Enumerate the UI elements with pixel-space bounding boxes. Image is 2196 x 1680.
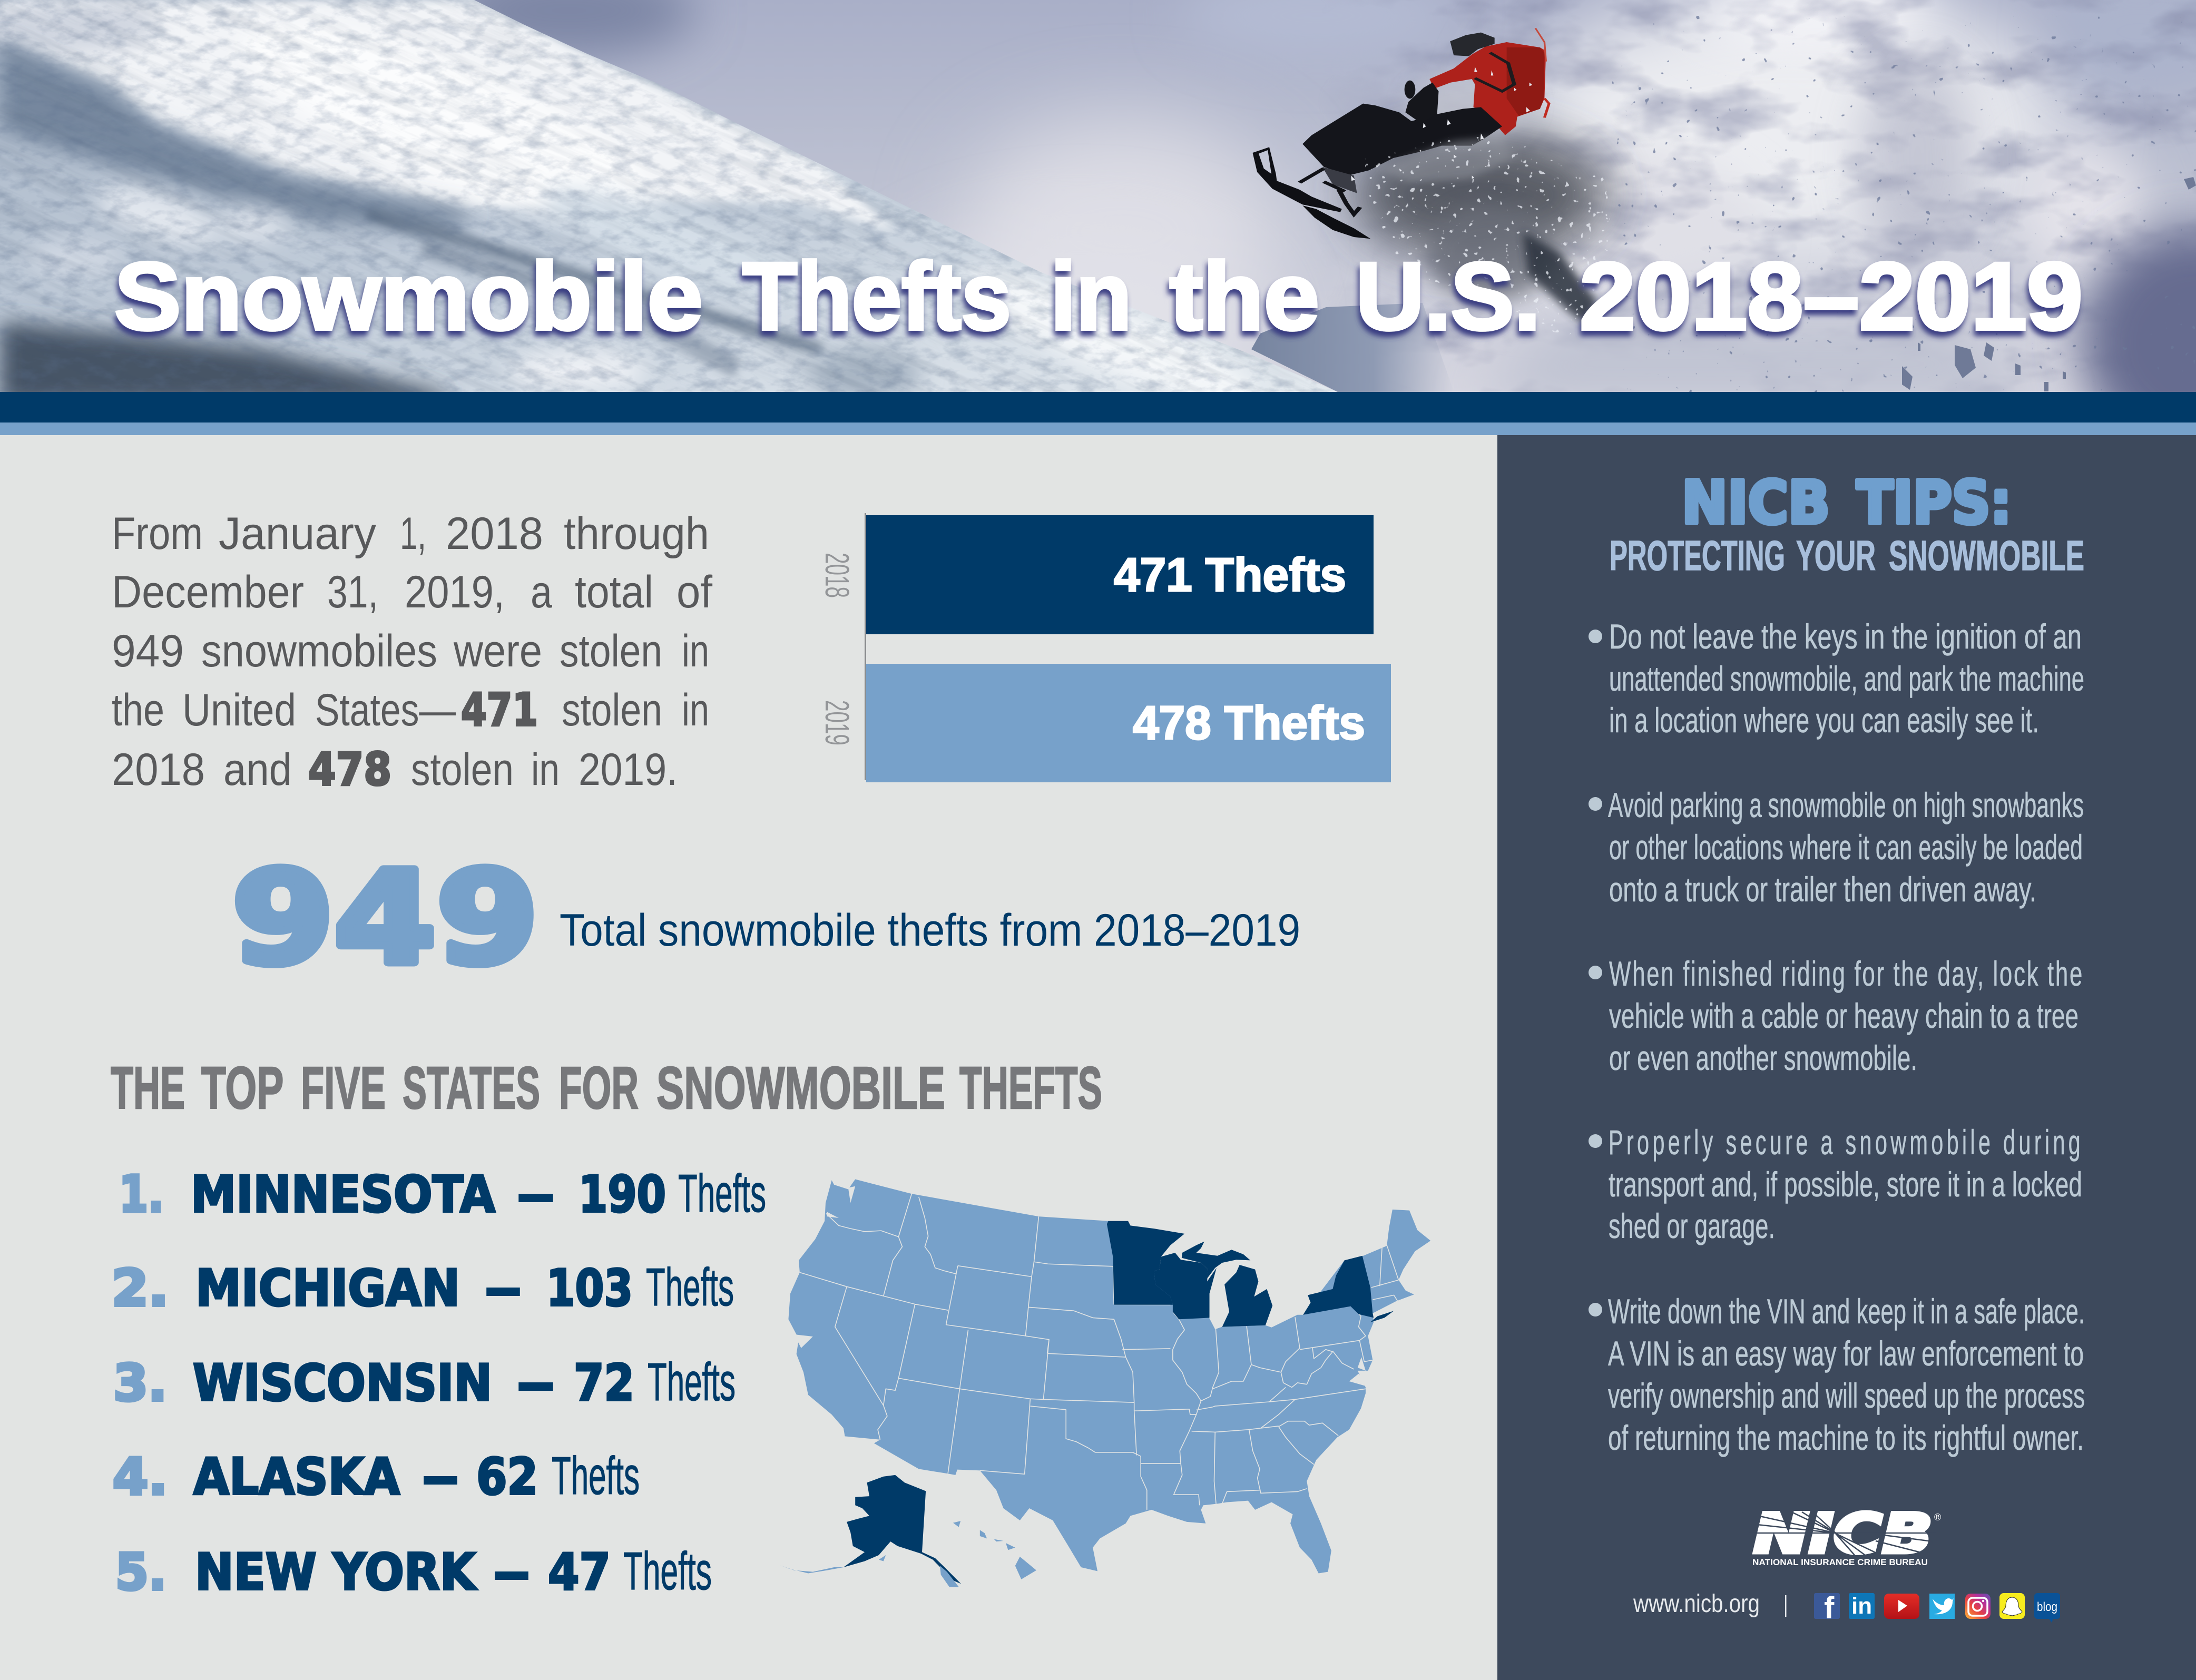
rank 5: New York: 47 [548,1544,611,1602]
title: 2018–2019 [1580,242,2083,350]
rank 1: Minnesota: 190 [579,1166,666,1224]
rank 3: Wisconsin: 72 [574,1354,634,1412]
title: U.S. [1356,242,1541,350]
bar: 2019 [866,664,1391,782]
icon: Snapchat [1999,1593,2025,1619]
rank 4: Alaska: Thefts [552,1447,640,1506]
title: Thefts [742,242,1011,350]
intro paragraph: 2019, [405,567,505,617]
rank 5: New York [115,1542,712,1602]
heading: top five states: FIVE [301,1055,386,1121]
intro paragraph: in [682,685,709,735]
tip 3 [1589,954,2084,1077]
intro paragraph: stolen [562,685,662,735]
intro paragraph: From [112,508,203,559]
logo: NICB: NATIONAL INSURANCE CRIME BUREAU [1752,1557,1928,1567]
rank 4: Alaska: 62 [476,1448,538,1506]
rank 4: Alaska [113,1447,640,1506]
intro paragraph: States— [315,685,456,735]
rank 5: New York: NEW YORK [195,1544,477,1602]
rank 1: Minnesota: — [517,1166,554,1224]
rider helmet [1450,33,1495,56]
title: in [1051,242,1132,350]
header dark band [0,392,2196,423]
intro paragraph: 471 [461,684,538,736]
rank 2: Michigan: 103 [546,1260,633,1318]
intro paragraph: 2018 [112,744,205,795]
map: Minnesota [1107,1221,1184,1305]
rank 1: Minnesota: Thefts [678,1164,766,1223]
map of the United States with top five states highlighted [780,1180,1430,1587]
rank 1: Minnesota [119,1164,766,1224]
tips heading: NICB [1682,469,1830,537]
intro paragraph: 1, [400,508,426,559]
heading: top five states: FOR [559,1055,639,1121]
tip 2 [1589,785,2084,909]
intro paragraph: 949 [112,626,184,676]
icon: YouTube [1884,1594,1919,1619]
intro paragraph: 2019. [579,744,678,795]
heading: top five states: THEFTS [959,1055,1102,1121]
rank 2: Michigan: Thefts [646,1258,734,1317]
tips subheading: SNOWMOBILE [1889,532,2084,579]
big number callout: 949 total [232,844,1300,993]
intro paragraph: 31, [327,567,378,617]
intro paragraph: through [564,508,709,559]
rank 3: Wisconsin: — [517,1354,554,1412]
rank 4: Alaska: 4. [113,1448,168,1506]
icon: snowmobile and rider [1252,28,1549,239]
bar chart: thefts per year [818,513,1391,782]
spray behind rider [1354,132,1607,258]
rank 1: Minnesota: MINNESOTA [191,1166,495,1224]
map: state borders [800,1194,1398,1510]
intro paragraph: stolen [560,626,662,676]
tip 2: onto a truck or trailer then driven away. [1609,870,2036,909]
rank 3: Wisconsin: Thefts [648,1353,736,1412]
sled body [1302,104,1502,175]
rank 3: Wisconsin [113,1353,736,1412]
logo: NICB: NICB [1753,1502,1933,1566]
bar: 2018: 471 Thefts [1114,549,1346,602]
big number callout: 949 total: Total snowmobile thefts from 2018–2019 [560,905,1300,956]
intro paragraph: December [112,567,304,617]
map: Alaska [844,1475,961,1584]
rank 1: Minnesota: 1. [119,1166,164,1224]
rank 5: New York: — [494,1544,530,1602]
hero photo: snowmobile jumping off a snowy slope [0,0,2196,392]
website link: www.nicb.org [1633,1590,1760,1618]
snow slope [0,0,1337,392]
intro paragraph: 2018 [446,508,543,559]
tip 3: or even another snowmobile. [1609,1038,1917,1077]
intro paragraph: of [677,567,713,617]
intro paragraph [112,508,713,796]
intro paragraph: and [223,744,292,795]
axis label: 2018: 2018 [818,553,856,598]
icon: blog: blog [2037,1600,2057,1614]
intro paragraph: in [682,626,709,676]
bar: 2019: 478 Thefts [1133,697,1365,750]
tips heading: TIPS: [1857,469,2012,537]
tip 5 [1589,1292,2085,1457]
rider jacket and backpack [1429,42,1546,135]
rank 4: Alaska: ALASKA [193,1448,400,1506]
tip 4 [1589,1123,2084,1245]
heading: top five states: THE [111,1055,185,1121]
intro paragraph: a [531,567,552,617]
big number callout: 949 total: 949 [232,844,538,993]
logo: NICB: ® [1934,1512,1941,1522]
rank 3: Wisconsin: WISCONSIN [193,1354,492,1412]
rank 2: Michigan: MICHIGAN [195,1260,460,1318]
icon: blog [2034,1593,2060,1623]
snow flakes in spray [1349,137,1623,348]
rank 2: Michigan: — [485,1260,521,1318]
ranked list of states [112,1164,766,1602]
icon: Instagram [1965,1594,1991,1619]
tip 1 [1589,617,2084,740]
icon: Facebook: f [1824,1591,1835,1625]
map: New York [1303,1256,1394,1322]
intro paragraph: the [112,685,164,735]
rank 5: New York: Thefts [623,1542,712,1601]
intro paragraph: 478 [308,743,391,796]
heading: top five states: STATES [403,1055,540,1121]
map: Hawaii [953,1521,1036,1579]
intro paragraph: snowmobiles [201,626,437,676]
tips subheading: YOUR [1796,532,1876,579]
header light band [0,423,2196,435]
blue rock behind spray [1251,303,1454,392]
heading: top five states: TOP [201,1055,283,1121]
icon: LinkedIn: in [1851,1593,1872,1619]
skis [1252,147,1342,212]
rank 3: Wisconsin: 3. [113,1354,167,1412]
icon: Facebook [1814,1591,1840,1625]
map: contiguous states [788,1180,1430,1573]
spray haze over sled [1381,137,1514,183]
heading: top five states: SNOWMOBILE [656,1055,945,1121]
intro paragraph: United [182,685,296,735]
title: the [1170,242,1319,350]
map: Michigan [1182,1242,1272,1327]
rank 2: Michigan: 2. [112,1260,169,1318]
tips subheading: PROTECTING [1610,532,1785,579]
intro paragraph: stolen [411,744,514,795]
panel: NICB tips [1497,435,2196,1680]
tip 4: shed or garage. [1609,1206,1775,1245]
intro paragraph: in [531,744,560,795]
intro paragraph: total [575,567,653,617]
intro paragraph: were [453,626,542,676]
title: Snowmobile [114,242,703,350]
bar: 2018 [866,515,1374,634]
flying snow specks [1612,16,2196,392]
rank 2: Michigan [112,1258,734,1318]
icon: Twitter [1929,1594,1955,1619]
rank 5: New York: 5. [115,1544,166,1602]
intro paragraph: January [219,508,376,559]
axis label: 2019: 2019 [818,700,856,745]
rank 4: Alaska: — [423,1448,458,1506]
map: Wisconsin [1154,1253,1217,1319]
